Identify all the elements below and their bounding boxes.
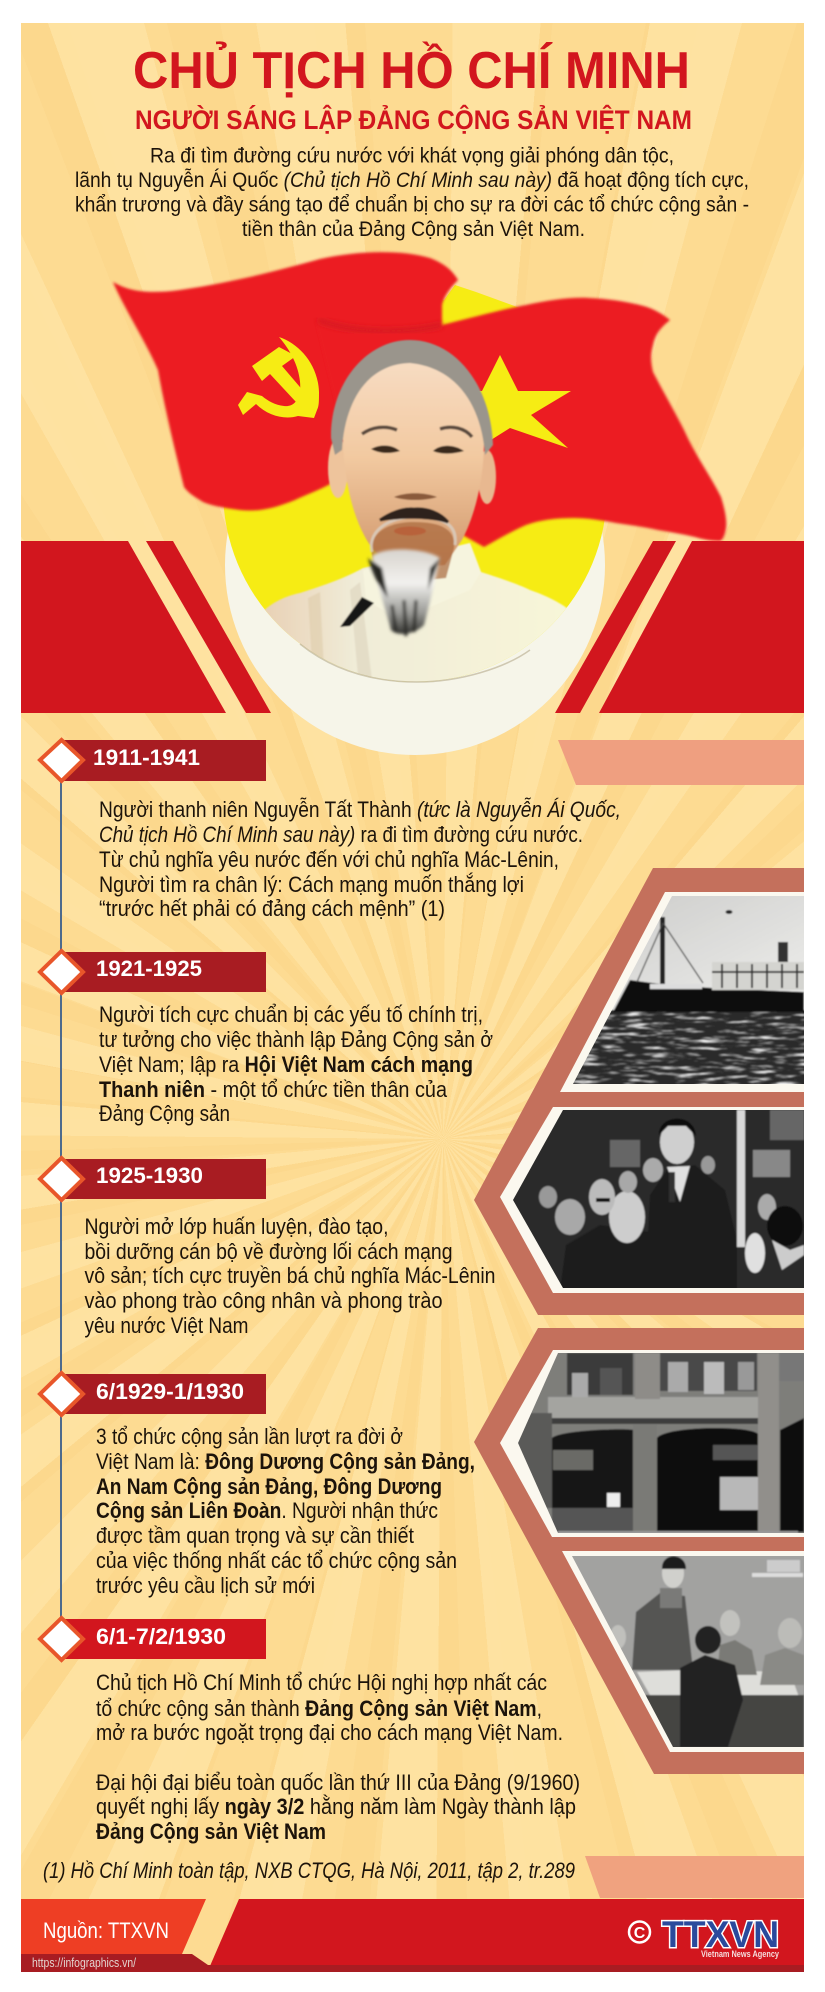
description: Đại hội đại biểu toàn quốc lần thứ III của Đảng (9/1960) [96,1770,580,1795]
beard outline [371,517,455,552]
date: 1925-1930 [96,1163,203,1188]
description: Người tìm ra chân lý: Cách mạng muốn thắng lợi [99,872,524,897]
description: Từ chủ nghĩa yêu nước đến với chủ nghĩa Mác-Lênin, [99,847,559,872]
url: https://infographics.vn/ [32,1955,136,1970]
flag fold shadow [318,320,442,331]
chin shadow [371,522,454,585]
portrait [262,340,575,700]
yellow disc [223,298,607,682]
footer red band [210,1899,804,1966]
cream crescent behind portrait [225,375,605,755]
goatee [368,549,440,636]
marker diamond [40,1373,83,1415]
flags [113,252,726,547]
description [96,1424,475,1598]
description: của việc thống nhất các tổ chức cộng sản [96,1548,457,1573]
marker diamond [40,1158,83,1200]
timeline item 6/1929-1/1930 [40,1373,475,1598]
source: Nguồn: TTXVN [43,1918,169,1943]
marker diamond [40,1618,83,1660]
description [96,1670,580,1844]
tunic fastening [340,597,374,627]
description: Việt Nam; lập ra Hội Việt Nam cách mạng [99,1052,473,1077]
description: tư tưởng cho việc thành lập Đảng Cộng sản ở [99,1027,493,1052]
description: Người tích cực chuẩn bị các yếu tố chính trị, [99,1002,483,1027]
logo: TTXVN [629,1914,779,1959]
hair [331,340,493,455]
description: Chủ tịch Hồ Chí Minh tổ chức Hội nghị hợp nhất các [96,1670,547,1695]
description: Người thanh niên Nguyễn Tất Thành (tức là Nguyễn Ái Quốc, [99,797,621,822]
date tag [63,1374,266,1414]
nose [394,493,437,500]
description: bồi dưỡng cán bộ về đường lối cách mạng [84,1239,452,1264]
footer [21,1899,804,1972]
photo: conference portrait [500,1105,810,1295]
description: 3 tổ chức cộng sản lần lượt ra đời ở [96,1424,403,1449]
tunic [264,542,567,682]
icon: yellow star [440,355,571,450]
intro text: lãnh tụ Nguyễn Ái Quốc (Chủ tịch Hồ Chí Minh sau này) đã hoạt động tích cực, [75,167,749,192]
description [99,797,621,921]
description: trước yêu cầu lịch sử mới [96,1573,315,1598]
footer dark strip [21,1954,804,1972]
subtitle: NGƯỜI SÁNG LẬP ĐẢNG CỘNG SẢN VIỆT NAM [135,103,692,135]
moustache [380,509,448,522]
salmon band bottom right [585,1856,804,1898]
marker diamond [40,740,83,781]
mouth [394,526,426,536]
description: tổ chức cộng sản thành Đảng Cộng sản Việt Nam, [96,1696,542,1721]
timeline item 1911-1941 [40,740,621,921]
yellow flag fold [442,285,520,327]
national flag [316,298,726,547]
title: CHỦ TỊCH HỒ CHÍ MINH [133,41,690,100]
date: 6/1-7/2/1930 [96,1624,226,1649]
date tag [63,1159,266,1199]
party flag [113,252,458,511]
icon: hammer and sickle [238,337,319,418]
red banner left [21,541,271,713]
intro text: khẩn trương và đầy sáng tạo để chuẩn bị cho sự ra đời các tổ chức cộng sản - [75,192,749,216]
date tag [63,740,266,781]
logo: TTXVN: Vietnam News Agency [701,1949,779,1959]
description: Đảng Cộng sản [99,1101,230,1126]
date tag [63,952,266,992]
date: 1911-1941 [93,745,200,770]
red banner right [555,541,804,713]
photo frame upper [474,868,810,1315]
date: 6/1929-1/1930 [96,1379,244,1404]
portrait lower edge [300,644,530,682]
description: quyết nghị lấy ngày 3/2 hằng năm làm Ngày thành lập [96,1794,576,1819]
timeline line [60,760,62,1640]
marker diamond [40,951,83,993]
eyes [371,445,464,454]
description: Thanh niên - một tổ chức tiền thân của [99,1077,448,1102]
description: Việt Nam là: Đông Dương Cộng sản Đảng, [96,1449,475,1474]
intro text: Ra đi tìm đường cứu nước với khát vọng giải phóng dân tộc, [150,144,674,168]
date tag [63,1619,266,1659]
intro text: tiền thân của Đảng Cộng sản Việt Nam. [242,217,585,241]
photo: building [500,1350,810,1540]
timeline item 1921-1925 [40,951,493,1126]
date: 1921-1925 [96,956,202,981]
collar [466,542,481,572]
intro text [75,144,749,241]
eyebrows [362,427,472,437]
photo frame lower [474,1328,810,1774]
timeline item 1925-1930 [40,1158,496,1338]
description: “trước hết phải có đảng cách mệnh” (1) [99,896,445,921]
footnote: (1) Hồ Chí Minh toàn tập, NXB CTQG, Hà Nội, 2011, tập 2, tr.289 [43,1858,575,1883]
description [84,1214,496,1338]
logo: TTXVN: TTXVN [662,1914,779,1955]
description: vào phong trào công nhân và phong trào [84,1288,442,1313]
description: An Nam Cộng sản Đảng, Đông Dương [96,1474,442,1499]
description: Người mở lớp huấn luyện, đào tạo, [84,1214,388,1239]
salmon band top right [558,740,804,785]
ears [328,438,348,498]
description: được tầm quan trọng và sự cần thiết [96,1523,414,1548]
description: Cộng sản Liên Đoàn. Người nhận thức [96,1498,438,1523]
description: vô sản; tích cực truyền bá chủ nghĩa Mác-Lênin [84,1263,496,1288]
face [343,345,484,570]
description: yêu nước Việt Nam [84,1313,248,1338]
description: Đảng Cộng sản Việt Nam [96,1819,326,1844]
description [99,1002,493,1126]
source tab [21,1899,206,1954]
photo: ship at sea [560,890,810,1092]
description: mở ra bước ngoặt trọng đại cho cách mạng Việt Nam. [96,1720,563,1745]
description: Chủ tịch Hồ Chí Minh sau này) ra đi tìm đường cứu nước. [99,822,583,847]
logo: TTXVN: C [634,1925,646,1942]
photo: founding conference painting [560,1550,810,1752]
timeline item 6/1-7/2/1930 [40,1618,580,1844]
